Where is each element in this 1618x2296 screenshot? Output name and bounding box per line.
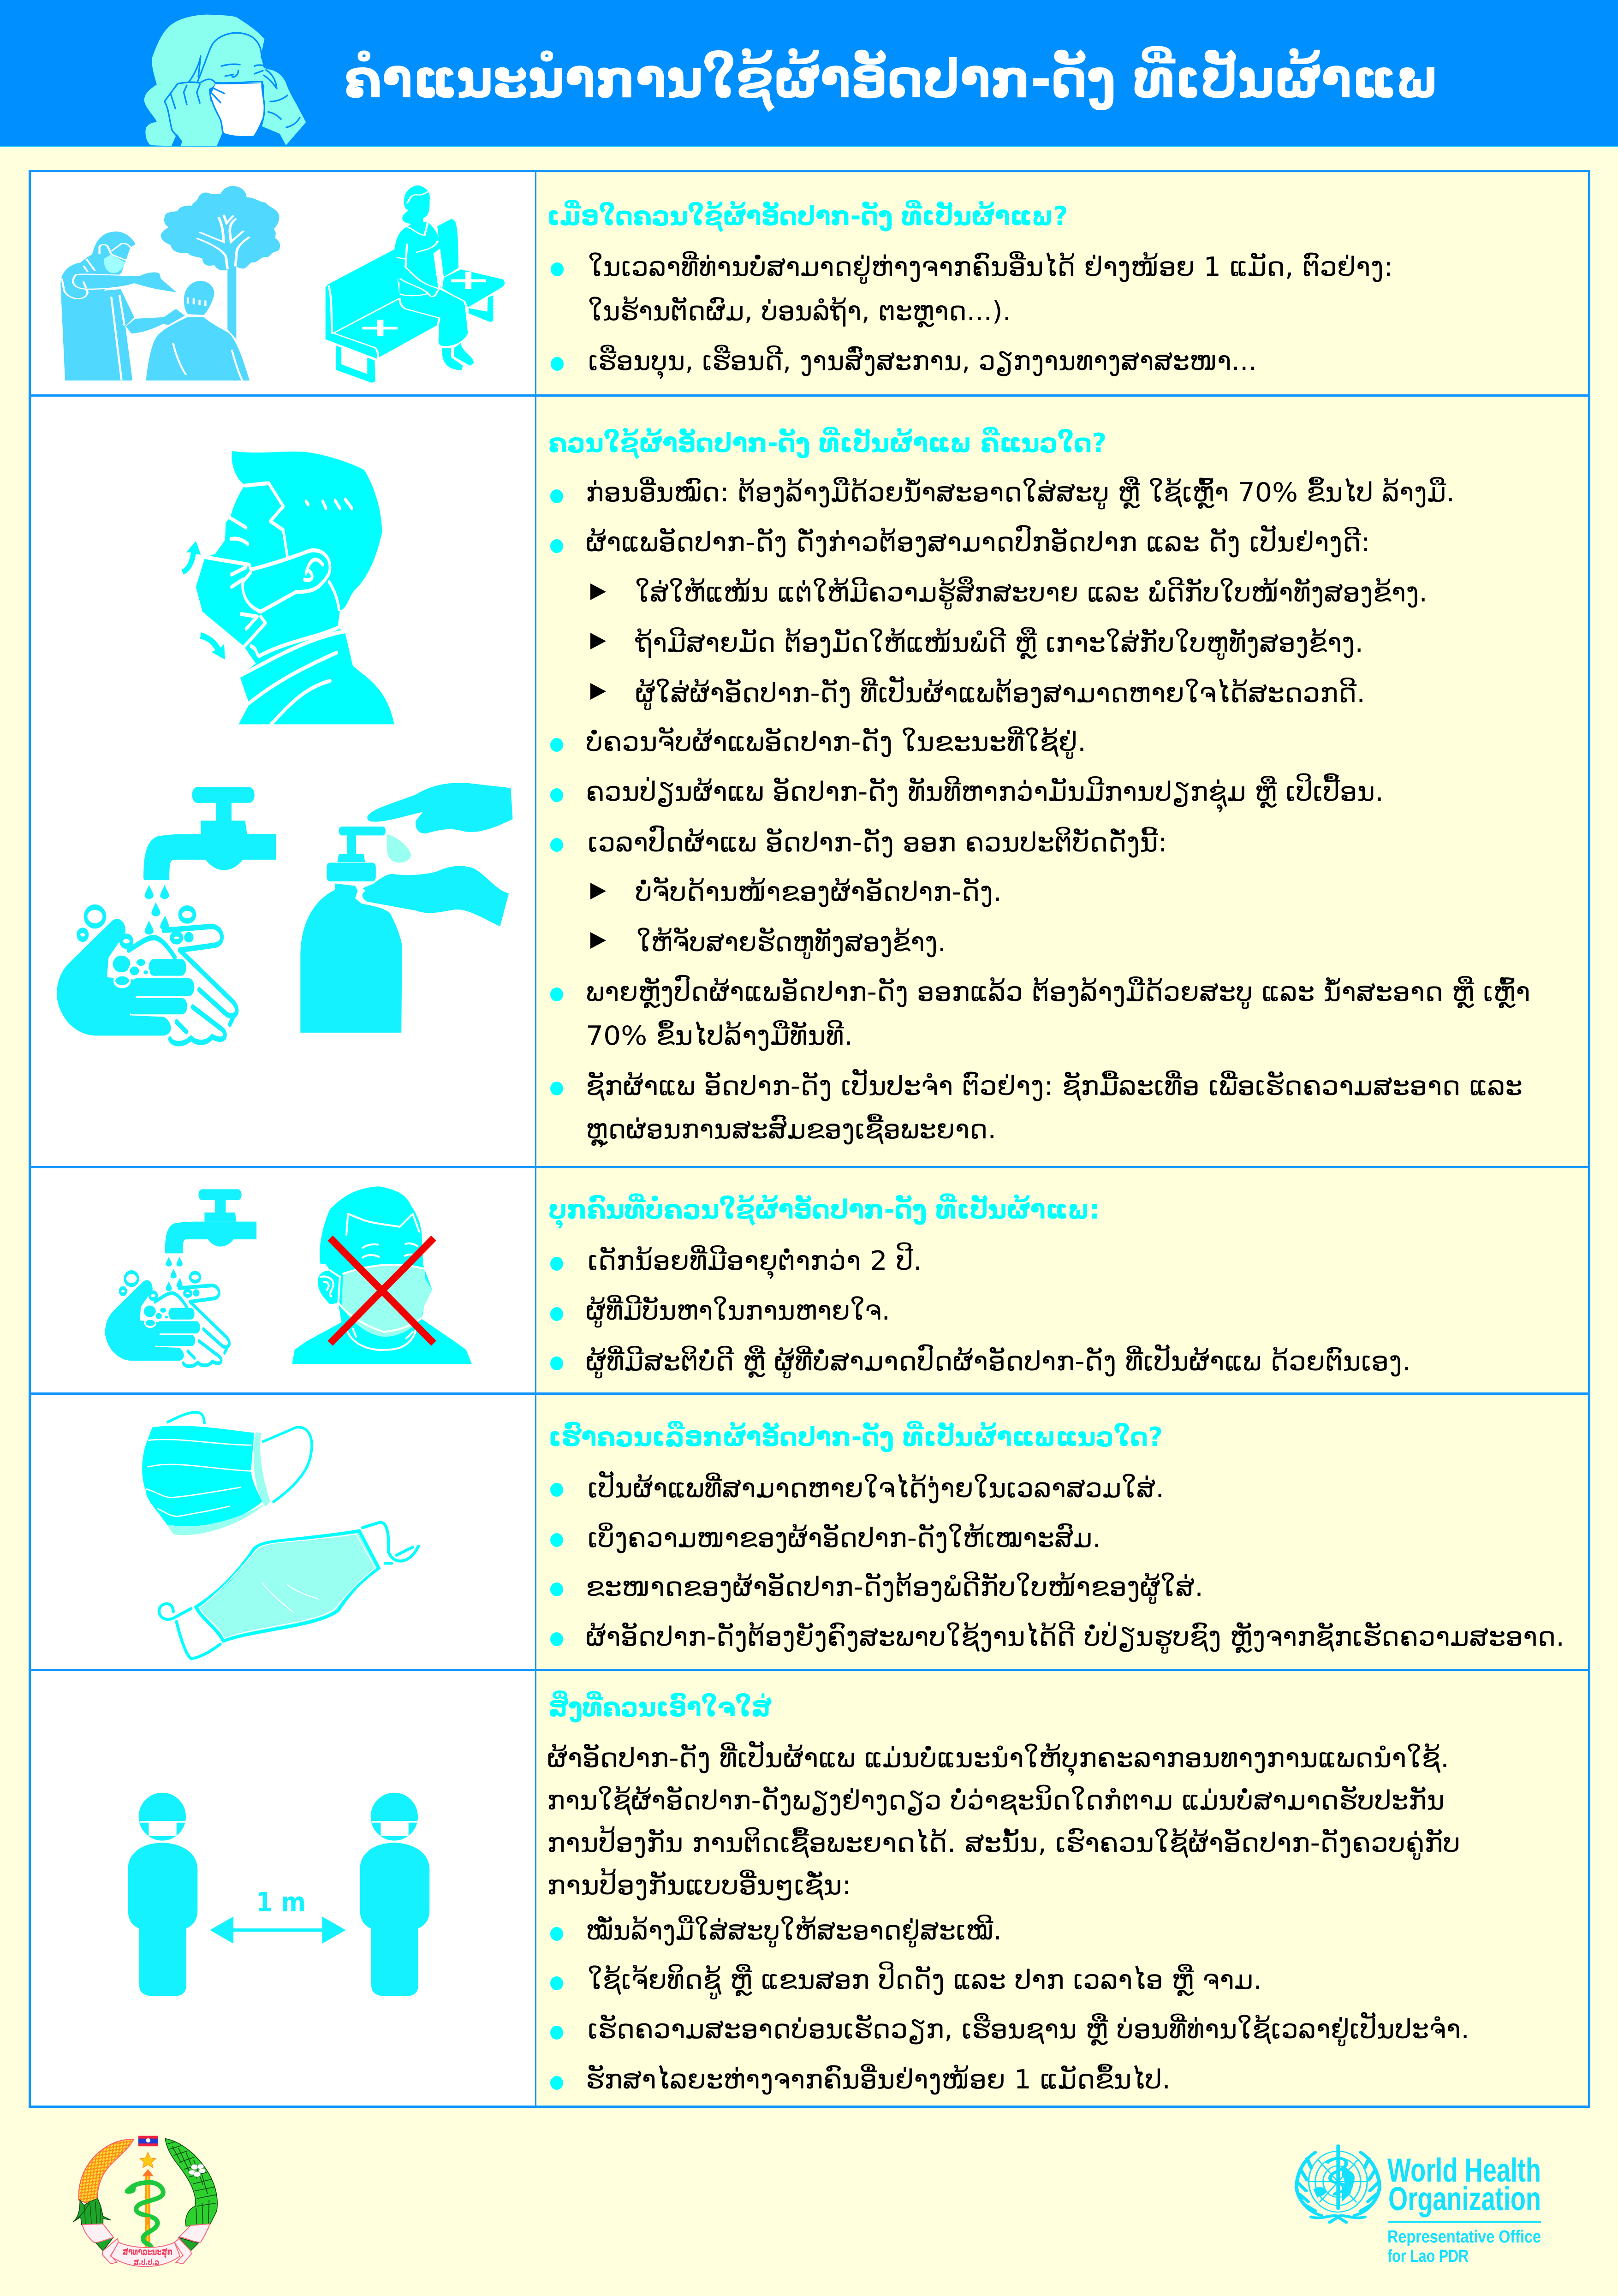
header banner <box>0 0 1618 147</box>
panel: choosing a mask <box>142 1412 1564 1659</box>
org name: World Health <box>1387 2152 1541 2189</box>
icon: person left <box>128 1793 197 1996</box>
bullet item: ຜູ້ທີ່ມີສະຕິບໍ່ດີ ຫຼື ຜູ້ທີ່ບໍ່ສາມາດປົດຜ້າອັດປາກ-ດັງ ທີ່ເປັນຜ້າແພ ດ້ວຍຕົນເອງ. <box>586 1344 1411 1378</box>
arrow: double-headed distance <box>210 1916 346 1944</box>
office name: Representative Office <box>1387 2227 1541 2247</box>
sub-bullet item: ຖ້າມີສາຍມັດ ຕ້ອງມັດໃຫ້ແໜ້ນພໍດີ ຫຼື ເກາະໃສ່ກັບໃບຫູທັງສອງຂ້າງ. <box>635 627 1363 660</box>
bullet item <box>550 975 1530 1051</box>
ribbon text: ສາທາລະນະສຸກ <box>123 2246 173 2259</box>
icon: washing hands small <box>105 1189 256 1366</box>
logo: World Health Organization <box>1297 2144 1541 2266</box>
icon: woman sitting on distanced bench <box>326 185 505 383</box>
icon: two people 1 metre apart <box>128 1793 429 1996</box>
heading: ບຸກຄົນທີ່ບໍ່ຄວນໃຊ້ຜ້າອັດປາກ-ດັງ ທີ່ເປັນຜ້າແພ: <box>548 1193 1100 1229</box>
bullet item: ຜ້າອັດປາກ-ດັງຕ້ອງຍັງຄົງສະພາບໃຊ້ງານໄດ້ດີ ບໍ່ປ່ຽນຮູບຊົງ ຫຼັງຈາກຊັກເຮັດຄວາມສະອາດ. <box>586 1621 1564 1654</box>
icon: hand sanitiser bottle and hands <box>300 783 513 1033</box>
flag <box>138 2136 158 2146</box>
paragraph: ການປ້ອງກັນ ການຕິດເຊື້ອພະຍາດໄດ້. ສະນັ້ນ, ເຮົາຄວນໃຊ້ຜ້າອັດປາກ-ດັງຄວບຄູ່ກັບ <box>547 1826 1460 1860</box>
sub-bullet item: ຜູ້ໃສ່ຜ້າອັດປາກ-ດັງ ທີ່ເປັນຜ້າແພຕ້ອງສາມາດຫາຍໃຈໄດ້ສະດວກດີ. <box>635 675 1365 710</box>
bullet item: ຜູ້ທີ່ມີບັນຫາໃນການຫາຍໃຈ. <box>586 1295 890 1327</box>
bullet item <box>551 251 1393 327</box>
sub-bullet item: ບໍ່ຈັບດ້ານໜ້າຂອງຜ້າອັດປາກ-ດັງ. <box>635 876 1002 907</box>
sub-bullet item: ໃຫ້ຈັບສາຍຮັດຫູທັງສອງຂ້າງ. <box>636 927 946 959</box>
green sheaf right <box>165 2139 217 2226</box>
bullet item: ເປັນຜ້າແພທີ່ສາມາດຫາຍໃຈໄດ້ງ່າຍໃນເວລາສວມໃສ່. <box>588 1470 1164 1504</box>
ribbons <box>82 2224 210 2266</box>
logo: World Health Organization: for Lao PDR <box>1387 2247 1469 2266</box>
paragraph: ການໃຊ້ຜ້າອັດປາກ-ດັງພຽງຢ່າງດຽວ ບໍ່ວ່າຊະນິດໃດກໍຕາມ ແມ່ນບໍ່ສາມາດຮັບປະກັນ <box>547 1784 1445 1816</box>
bullet item: ໃນຮ້ານຕັດຜົມ, ບ່ອນລໍຖ້າ, ຕະຫຼາດ...). <box>588 296 1011 327</box>
heading: ຄວນໃຊ້ຜ້າອັດປາກ-ດັງ ທີ່ເປັນຜ້າແພ ຄືແນວໃດ? <box>548 427 1106 459</box>
paragraph: ການປ້ອງກັນແບບອື່ນໆເຊັ່ນ: <box>547 1868 851 1901</box>
title: ຄຳແນະນຳການໃຊ້ຜ້າອັດປາກ-ດັງ ທີ່ເປັນຜ້າແພ <box>344 46 1439 112</box>
icon: cloth mask <box>159 1522 418 1659</box>
icon: down arrow <box>200 632 225 660</box>
logo: World Health Organization: Organization <box>1388 2181 1541 2218</box>
white flower <box>189 2164 206 2177</box>
bullet item: ບໍ່ຄວນຈັບຜ້າແພອັດປາກ-ດັງ ໃນຂະນະທີ່ໃຊ້ຢູ່. <box>586 726 1086 759</box>
panel: who should not use <box>105 1186 1411 1378</box>
icon: person right <box>360 1793 429 1996</box>
bullet item: ໃຊ້ເຈ້ຍທິດຊູ້ ຫຼື ແຂນສອກ ປິດດັງ ແລະ ປາກ ເວລາໄອ ຫຼື ຈາມ. <box>588 1961 1262 1999</box>
panel: things to note <box>128 1691 1469 2095</box>
sub-bullet item: ໃສ່ໃຫ້ແໜ້ນ ແຕ່ໃຫ້ມີຄວາມຮູ້ສຶກສະບາຍ ແລະ ພໍດີກັບໃບໜ້າທັງສອງຂ້າງ. <box>635 577 1428 609</box>
panel: how to use <box>57 427 1530 1148</box>
heading: ສິ່ງທີ່ຄວນເອົາໃຈໃສ່ <box>548 1691 772 1723</box>
bullet item: ເວລາປົດຜ້າແພ ອັດປາກ-ດັງ ອອກ ຄວນປະຕິບັດດັ່ງນີ້: <box>588 825 1167 858</box>
icon: washing hands under tap <box>57 787 276 1044</box>
icon: up arrow <box>181 541 201 575</box>
paragraph <box>547 1740 1460 1901</box>
logo: Lao Ministry of Health emblem <box>73 2136 217 2267</box>
bullet item: ຮັກສາໄລຍະຫ່າງຈາກຄົນອື່ນຢ່າງໜ້ອຍ 1 ແມັດຂຶ້ນໄປ. <box>586 2064 1171 2095</box>
bullet item: 70% ຂຶ້ນໄປລ້າງມືທັນທີ. <box>586 1020 853 1051</box>
bullet item: ຫຼຸດຜ່ອນການສະສົມຂອງເຊື້ອພະຍາດ. <box>586 1113 996 1148</box>
bullet item: ເຮືອນບຸນ, ເຮືອນດີ, ງານສົ່ງສະການ, ວຽກງານທາງສາສະໜາ... <box>588 345 1257 380</box>
bullet item: ຂະໜາດຂອງຜ້າອັດປາກ-ດັງຕ້ອງພໍດີກັບໃບໜ້າຂອງຜູ້ໃສ່. <box>586 1571 1203 1604</box>
bullet item: ຊັກຜ້າແພ ອັດປາກ-ດັງ ເປັນປະຈຳ ຕົວຢ່າງ: ຊັກມື້ລະເທື່ອ ເພື່ອເຮັດຄວາມສະອາດ ແລະ <box>586 1068 1523 1101</box>
icon: man wearing mask side view <box>181 451 394 724</box>
bullet item: ເດັກນ້ອຍທີ່ມີອາຍຸຕ່ຳກວ່າ 2 ປີ. <box>588 1242 922 1279</box>
bullet item: ພາຍຫຼັງປົດຜ້າແພອັດປາກ-ດັງ ອອກແລ້ວ ຕ້ອງລ້າງມືດ້ວຍສະບູ ແລະ ນ້ຳສະອາດ ຫຼື ເຫຼົ້າ <box>586 975 1530 1009</box>
heading: ເຮົາຄວນເລືອກຜ້າອັດປາກ-ດັງ ທີ່ເປັນຜ້າແພແນວໃດ? <box>548 1421 1163 1452</box>
icon: WHO emblem <box>1297 2144 1380 2222</box>
green stalks left <box>73 2199 111 2225</box>
distance label: 1 m <box>256 1886 306 1918</box>
bullet item: ຄວນປ່ຽນຜ້າແພ ອັດປາກ-ດັງ ທັນທີຫາກວ່າມັນມີການປຽກຊຸ່ມ ຫຼື ເປິເປື້ອນ. <box>586 773 1384 813</box>
bullet item: ໃນເວລາທີ່ທ່ານບໍ່ສາມາດຢູ່ຫ່າງຈາກຄົນອື່ນໄດ້ ຢ່າງໜ້ອຍ 1 ແມັດ, ຕົວຢ່າງ: <box>588 251 1393 284</box>
heading: ເມື່ອໃດຄວນໃຊ້ຜ້າອັດປາກ-ດັງ ທີ່ເປັນຜ້າແພ? <box>547 200 1068 232</box>
star <box>140 2152 156 2168</box>
bullet item: ກ່ອນອື່ນໝົດ: ຕ້ອງລ້າງມືດ້ວຍນ້ຳສະອາດໃສ່ສະບູ ຫຼື ໃຊ້ເຫຼົ້າ 70% ຂຶ້ນໄປ ລ້າງມື. <box>586 476 1455 509</box>
bullet item: ຜ້າແພອັດປາກ-ດັງ ດັ່ງກ່າວຕ້ອງສາມາດປົກອັດປາກ ແລະ ດັງ ເປັນຢ່າງດີ: <box>586 524 1370 558</box>
icon: woman putting on mask <box>144 15 306 146</box>
icon: surgical mask <box>142 1412 312 1535</box>
bullet item: ເຮັດຄວາມສະອາດບ່ອນເຮັດວຽກ, ເຮືອນຊານ ຫຼື ບ່ອນທີ່ທ່ານໃຊ້ເວລາຢູ່ເປັນປະຈຳ. <box>588 2011 1469 2046</box>
paragraph: ຜ້າອັດປາກ-ດັງ ທີ່ເປັນຜ້າແພ ແມ່ນບໍ່ແນະນຳໃຫ້ບຸກຄະລາກອນທາງການແພດນຳໃຊ້. <box>547 1740 1449 1777</box>
panel: when to use <box>60 185 1393 383</box>
staff and snake <box>125 2169 163 2248</box>
bullet item: ໝັ່ນລ້າງມືໃສ່ສະບູໃຫ້ສະອາດຢູ່ສະເໝີ. <box>586 1915 1002 1947</box>
bullet item <box>550 1068 1523 1148</box>
rice sheaf left <box>79 2139 134 2205</box>
icon: red cross <box>330 1238 434 1343</box>
logo: Lao Ministry of Health emblem: ສ.ປ.ປ.ລ <box>134 2258 159 2267</box>
bullet item: ເບິ່ງຄວາມໜາຂອງຜ້າອັດປາກ-ດັງໃຫ້ເໝາະສົມ. <box>588 1523 1101 1553</box>
icon: man with crossed-out mask <box>292 1186 472 1364</box>
icon: barber wearing mask with customer and tree <box>60 186 280 381</box>
